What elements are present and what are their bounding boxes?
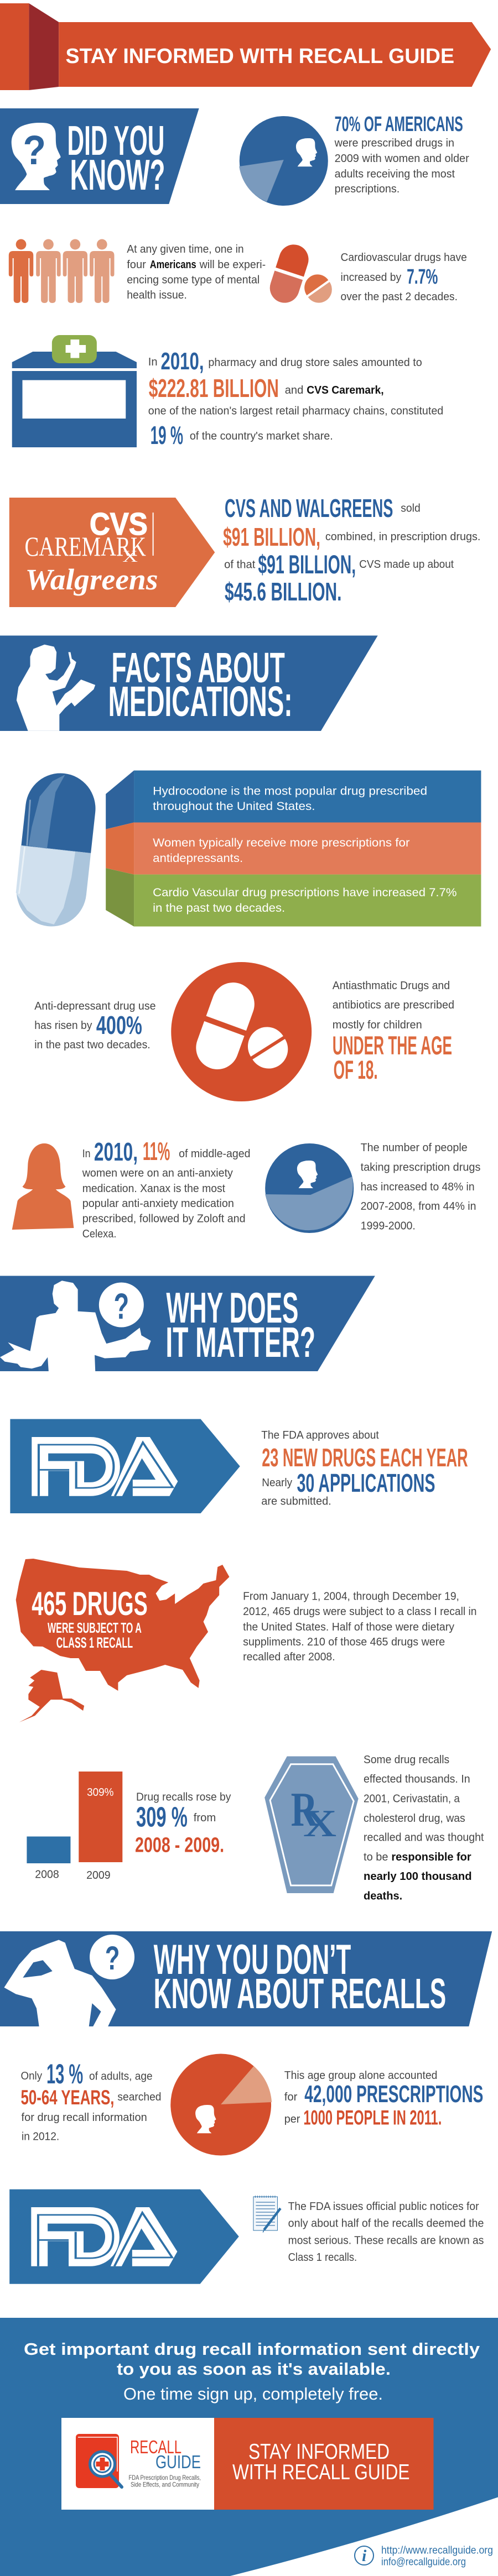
logo: CVS Caremark: CVS [90,507,148,542]
text: 11 percent of women: women were on an anti-anxiety [82,1167,233,1179]
logo: FDA [31,2207,177,2266]
text: CVS and Walgreens figures: CVS made up about [359,558,454,571]
icon: question bubble [90,1935,134,1979]
panel: stacked facts [106,771,481,927]
map: United States [16,1559,229,1722]
text: 11 percent of women: popular anti-anxiety medication [82,1198,234,1210]
fact bar: cardio vascular [106,868,481,927]
icon: head with question mark: ? [23,127,46,173]
icon: capsule and tablet [266,241,337,308]
icon: question bubble: ? [114,1286,129,1326]
text: 11 percent of women: 11% [143,1137,170,1166]
text: pharmacy sales: $222.81 BILLION [149,374,279,403]
call to action heading: to you as soon as it's available. [117,2359,391,2379]
button text: STAY INFORMED [248,2440,390,2464]
text: one in four Americans: will be experi- [199,259,266,271]
text: only 13 percent of adults: of adults, age [89,2070,153,2083]
text: pharmacy sales: one of the nation's largest retail pharmacy chains, constituted [148,405,443,417]
text: 42,000 prescriptions: This age group alone accounted [284,2070,437,2082]
logo text: Side Effects, and Community [131,2480,199,2488]
text: anti-depressant use: 400% [96,1011,142,1039]
icon: shrugging man [0,1281,151,1371]
text: CVS and Walgreens figures [223,494,480,606]
text: CVS and Walgreens figures: $91 BILLION, [223,523,320,551]
heading banner: facts about medications [0,636,378,731]
fact bar: women: Women typically receive more prescriptions for [153,837,410,849]
text: recalls rose 309 percent [135,1791,231,1857]
text: pharmacy sales: In [148,356,158,368]
text: 465 drugs recalled: recalled after 2008. [243,1651,335,1663]
logo: CVS Caremark [24,507,154,566]
text: antiasthmatic drugs [333,980,454,1084]
text: 11 percent of women: prescribed, followed by Zoloft and [82,1213,246,1225]
text: number of people on prescriptions: has increased to 48% in [361,1181,475,1193]
text: 11 percent of women: medication. Xanax is the most [82,1183,226,1195]
map label [32,1585,148,1651]
heading banner: why you don't know about recalls [0,1931,492,2026]
icon: question bubble: ? [105,1940,120,1977]
text: FDA public notices: Class 1 recalls. [288,2251,357,2264]
text: 11 percent of women: Celexa. [82,1228,116,1240]
text: some drug recalls: 2001, Cerivastatin, a [364,1793,460,1805]
heading text [68,118,165,199]
panel: footer call to action [0,2318,498,2576]
text: cardiovascular drugs [341,252,467,303]
text: FDA approvals: Nearly [262,1477,292,1489]
logo: Walgreens: Walgreens [25,563,158,596]
text: some drug recalls: deaths. [364,1890,402,1903]
text: some drug recalls: responsible for [391,1851,471,1863]
text: FDA approvals: are submitted. [261,1495,331,1508]
text: some drug recalls: cholesterol drug, was [364,1812,465,1825]
heading text: KNOW? [70,151,165,199]
text: pharmacy sales: pharmacy and drug store sales amounted to [208,357,422,369]
text: recalls rose 309 percent: 2008 - 2009. [135,1833,224,1857]
text: some drug recalls [364,1754,484,1903]
text: pharmacy sales: 2010, [160,348,204,375]
text: pharmacy sales [148,348,443,450]
text: 465 drugs recalled: From January 1, 2004, through December 19, [243,1590,459,1603]
text: anti-depressant use [34,1000,156,1051]
fact bar: hydrocodone [106,771,481,829]
text: 42,000 prescriptions [284,2070,483,2129]
text: only 13 percent of adults [21,2058,161,2143]
logo: FDA [32,1437,178,1496]
text: 70 percent of Americans: 2009 with women and older [335,153,469,165]
heading text: IT MATTER? [165,1319,315,1366]
text: 70 percent of Americans [334,113,469,195]
text: one in four Americans: Americans [150,259,196,271]
fact bar: cardio vascular: in the past two decades. [153,902,285,915]
bar chart: recalls 2008 to 2009 [27,1772,122,1882]
text: CVS and Walgreens figures: $91 BILLION, [258,550,356,579]
text: CVS and Walgreens figures: $45.6 BILLION. [225,578,342,606]
text: recalls rose 309 percent: Drug recalls rose by [136,1791,231,1804]
icon: woman silhouette [12,1143,74,1230]
heading banner: did you know [0,108,199,204]
fact bar: women [106,823,481,875]
icon: head [195,2105,216,2133]
text: some drug recalls: recalled and was thought [364,1831,484,1844]
contact details [381,2544,493,2568]
text: 465 drugs recalled [243,1590,477,1663]
text: FDA approvals [261,1429,468,1508]
map label: 465 DRUGS [32,1585,148,1622]
button text [232,2440,409,2484]
text: 70 percent of Americans: adults receiving the most [335,168,455,180]
text: one in four Americans [127,243,266,301]
text: 42,000 prescriptions: for [284,2091,298,2103]
text: FDA public notices [288,2201,484,2264]
icon: info: i [362,2547,367,2565]
text: number of people on prescriptions: The number of people [361,1142,468,1154]
text: 465 drugs recalled: the United States. Half of those were dietary [243,1621,454,1633]
panel: CVS and Walgreens logos arrow [9,498,215,607]
icon: pharmacy [12,335,137,447]
icon: man with book [17,645,95,731]
text: some drug recalls: nearly 100 thousand [364,1870,472,1883]
text: 70 percent of Americans: were prescribed drugs in [334,137,454,149]
text: recalls rose 309 percent: 309 % [136,1801,188,1833]
panel: FDA arrow [10,1419,240,1513]
text: only 13 percent of adults: 50-64 YEARS, [21,2086,114,2109]
call to action heading [24,2339,480,2379]
icon: large capsule [13,770,99,930]
contact details: info@recallguide.org [381,2557,466,2568]
text: 11 percent of women [82,1137,251,1240]
button card [61,2418,434,2510]
text: antiasthmatic drugs: Antiasthmatic Drugs and [333,980,450,992]
text: some drug recalls: effected thousands. In [364,1773,470,1785]
text: one in four Americans: At any given time, one in [127,243,244,255]
logo text [128,2437,201,2488]
text: pharmacy sales: 19 % [151,421,183,450]
icon: head [297,1161,318,1188]
icon: Rx coffin [264,1756,359,1893]
heading text: MEDICATIONS: [108,678,293,725]
text: antiasthmatic drugs: OF 18. [334,1056,378,1084]
call to action subheading: One time sign up, completely free. [123,2384,383,2403]
map label: WERE SUBJECT TO A [48,1621,142,1636]
text: FDA public notices: most serious. These recalls are known as [288,2234,484,2247]
heading text [165,1284,315,1366]
fact bar: hydrocodone: throughout the United States. [153,800,315,813]
icon: head with question mark [12,123,61,190]
text: anti-depressant use: Anti-depressant drug use [34,1000,156,1012]
text: some drug recalls: Some drug recalls [364,1754,449,1766]
text: number of people on prescriptions [361,1142,481,1232]
button text: WITH RECALL GUIDE [232,2460,409,2484]
text: only 13 percent of adults: in 2012. [22,2131,59,2143]
logo: CVS Caremark: X [122,547,138,566]
text: CVS and Walgreens figures: CVS AND WALGREENS [225,494,393,522]
text: antiasthmatic drugs: mostly for children [333,1019,422,1031]
text: FDA public notices: The FDA issues official public notices for [288,2201,479,2213]
text: cardiovascular drugs: 7.7% [407,265,438,289]
pie chart: 70 percent [239,116,328,206]
text: 11 percent of women: In [82,1148,91,1160]
logo text: RECALL [130,2437,181,2457]
text: FDA approvals: The FDA approves about [261,1429,379,1441]
icon: red circle with pills [171,962,312,1101]
text: only 13 percent of adults: searched [117,2091,161,2103]
pie chart: 13 percent [170,2054,272,2155]
icon: four people [9,239,114,303]
icon: Rx coffin: x [303,1786,337,1848]
logo text: FDA Prescription Drug Recalls, [128,2474,201,2481]
text: cardiovascular drugs: increased by [341,271,401,284]
panel: FDA arrow lower [9,2190,239,2284]
text: 465 drugs recalled: 2012, 465 drugs were subject to a class I recall in [243,1606,477,1618]
text: FDA public notices: only about half of the recalls deemed the [288,2217,484,2230]
logo text: GUIDE [155,2452,201,2472]
text: only 13 percent of adults: for drug recall information [22,2112,147,2124]
text: pharmacy sales: CVS Caremark, [307,384,384,396]
call to action heading: Get important drug recall information sent directly [24,2339,480,2359]
text: one in four Americans: health issue. [127,289,187,301]
bar chart: recalls 2008 to 2009: 2009 [86,1869,111,1882]
text: anti-depressant use: in the past two decades. [34,1039,151,1051]
text: 11 percent of women: 2010, [94,1138,138,1166]
text: CVS and Walgreens figures: combined, in prescription drugs. [325,531,480,543]
text: number of people on prescriptions: 1999-2000. [361,1220,416,1232]
title banner [0,3,491,90]
text: only 13 percent of adults: Only [21,2070,42,2082]
text: cardiovascular drugs: Cardiovascular drugs have [341,252,467,264]
fact bar: hydrocodone: Hydrocodone is the most popular drug prescribed [153,785,427,798]
map: Alaska [19,1670,84,1722]
text: pharmacy sales: and [285,384,303,396]
text: 42,000 prescriptions: per [284,2113,300,2125]
text: 11 percent of women: of middle-aged [179,1148,251,1160]
text: only 13 percent of adults: 13 % [46,2058,83,2089]
icon: notepad and pen [253,2196,281,2233]
text: number of people on prescriptions: 2007-2008, from 44% in [361,1200,476,1213]
icon: info [355,2546,374,2565]
fact bar: cardio vascular: Cardio Vascular drug prescriptions have increased 7.7% [153,886,456,899]
text: cardiovascular drugs: over the past 2 decades. [341,291,458,303]
bar chart: recalls 2008 to 2009: 309% [87,1786,114,1799]
text: pharmacy sales: of the country's market share. [190,430,333,442]
fact bar: women: antidepressants. [153,852,243,865]
icon: saluting man [4,1940,116,2026]
icon: question bubble [99,1283,144,1327]
text: some drug recalls: to be [364,1851,388,1863]
heading text [154,1937,446,2018]
text: CVS and Walgreens figures: of that [224,558,256,571]
text: one in four Americans: encing some type of mental [127,274,260,286]
text: anti-depressant use: has risen by [34,1020,92,1032]
bar chart: recalls 2008 to 2009: 2008 [35,1868,59,1881]
logo: CVS Caremark: CAREMARK [24,531,146,562]
title text: STAY INFORMED WITH RECALL GUIDE [66,45,454,68]
heading banner: why does it matter [0,1276,375,1371]
heading text: WHY DOES [166,1284,298,1332]
text: 70 percent of Americans: prescriptions. [335,183,400,195]
text: antiasthmatic drugs: antibiotics are prescribed [333,999,454,1011]
text: number of people on prescriptions: taking prescription drugs [361,1161,481,1174]
icon: Rx coffin: R [291,1783,318,1836]
pie chart: 48 percent [265,1143,354,1233]
heading text: WHY YOU DON’T [154,1937,351,1983]
icon: head [296,138,317,166]
heading text: DID YOU [68,118,164,164]
heading text [108,645,293,725]
text: CVS and Walgreens figures: sold [401,502,421,515]
text: one in four Americans: four [127,259,146,271]
map label: CLASS 1 RECALL [56,1634,133,1651]
heading text: FACTS ABOUT [112,645,285,692]
text: recalls rose 309 percent: from [194,1812,216,1824]
text: 465 drugs recalled: suppliments. 210 of those 465 drugs were [243,1636,445,1648]
logo: recall guide book [76,2434,122,2488]
